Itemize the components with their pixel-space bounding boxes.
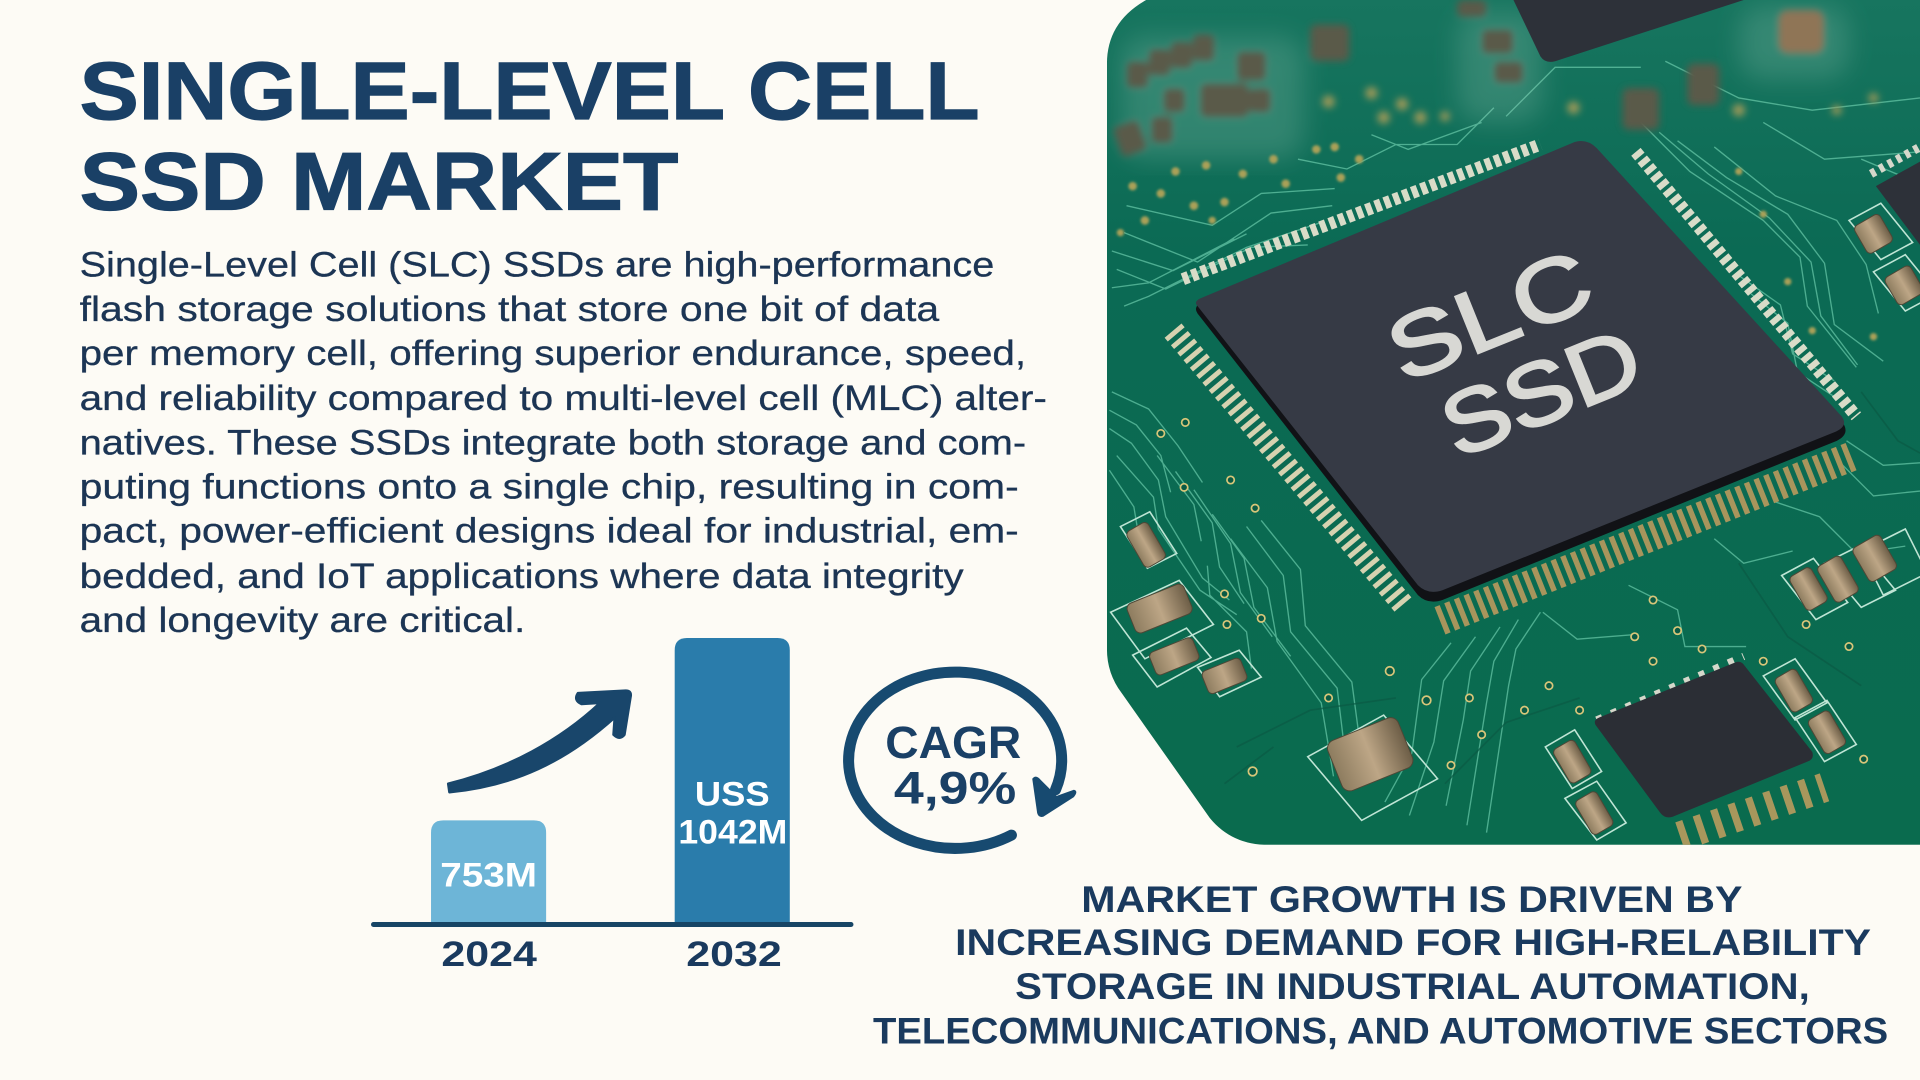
CAGR badge: [849, 672, 1076, 848]
description text block: per memory cell, offering superior endurance, speed,: [80, 333, 1026, 373]
icon: top partial chip: [1513, 0, 1744, 62]
bar: 2032: [675, 638, 790, 926]
description text block: puting functions onto a single chip, resulting in com-: [80, 466, 1019, 506]
icon: small gold vias on lower board: [1157, 419, 1867, 776]
icon: lower right chip: [1595, 656, 1824, 836]
icon: blurred background components: [1112, 0, 1878, 159]
chip pins: [1173, 144, 1856, 621]
year labels: [441, 934, 782, 974]
icon: main SLC SSD chip: [1173, 141, 1856, 621]
bar: 2024: [431, 820, 546, 923]
chip label: SLC: [1373, 230, 1606, 401]
description text block: Single-Level Cell (SLC) SSDs are high-performance: [80, 245, 994, 285]
title: SSD MARKET: [80, 136, 678, 227]
bar: 2032: USS: [695, 776, 770, 814]
description text block: [80, 245, 1047, 640]
bar: 2024: 753M: [440, 857, 537, 895]
description text block: natives. These SSDs integrate both storage and com-: [80, 422, 1026, 462]
CAGR label: CAGR: [885, 717, 1021, 768]
icon: lower components: [1111, 203, 1920, 840]
market growth statement: [873, 879, 1888, 1051]
description text block: flash storage solutions that store one bit of data: [80, 289, 939, 329]
year labels: 2024: [441, 934, 537, 974]
image panel: circuit board with SLC SSD chip: [1107, 0, 1920, 845]
chip label: SSD: [1427, 308, 1655, 477]
title: SINGLE-LEVEL CELL: [80, 46, 980, 137]
market growth statement: INCREASING DEMAND FOR HIGH-RELABILITY: [955, 922, 1871, 963]
description text block: pact, power-efficient designs ideal for industrial, em-: [80, 510, 1019, 550]
description text block: and longevity are critical.: [80, 600, 525, 640]
bar: 2032: 1042M: [678, 814, 787, 852]
icon: right partial chip: [1871, 147, 1920, 245]
arrow: growth: [448, 691, 631, 792]
CAGR label: 4,9%: [894, 762, 1016, 813]
ring arrow: [849, 672, 1076, 848]
market growth statement: TELECOMMUNICATIONS, AND AUTOMOTIVE SECTORS: [873, 1010, 1888, 1051]
market growth statement: MARKET GROWTH IS DRIVEN BY: [1081, 879, 1742, 920]
title: [80, 46, 980, 227]
description text block: and reliability compared to multi-level cell (MLC) alter-: [80, 378, 1047, 418]
axis line: [371, 922, 853, 927]
market growth statement: STORAGE IN INDUSTRIAL AUTOMATION,: [1015, 966, 1810, 1007]
description text block: bedded, and IoT applications where data integrity: [80, 556, 964, 596]
icon: scattered solder vias: [1117, 143, 1877, 340]
year labels: 2032: [686, 934, 782, 974]
bar chart: [371, 638, 853, 974]
CAGR label: [885, 717, 1021, 813]
chip label: [1392, 256, 1636, 453]
